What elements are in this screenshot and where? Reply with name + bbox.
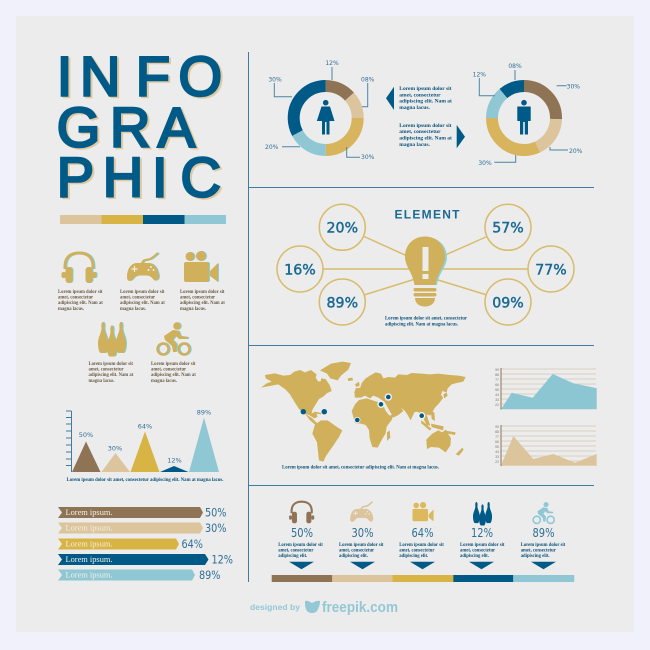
note: women: Lorem ipsum dolor sit bbox=[399, 86, 452, 92]
text: cyclist bbox=[151, 362, 196, 384]
icon: woman bbox=[317, 100, 334, 134]
text: headphones bbox=[58, 290, 103, 312]
stat: controller 30%: Lorem ipsum dolor sit bbox=[339, 543, 384, 548]
Central America and Caribbean bbox=[305, 414, 318, 426]
values bbox=[265, 60, 375, 161]
axis ticks: 77 bbox=[495, 435, 499, 439]
ribbon labels: Lorem ipsum. bbox=[66, 540, 112, 548]
axis ticks bbox=[495, 368, 499, 407]
note: women: adipiscing elit. Nam at bbox=[399, 98, 452, 104]
note: men: amet, consectetur bbox=[399, 129, 441, 135]
title colour bar bbox=[60, 215, 226, 224]
note: men bbox=[399, 123, 452, 148]
text: video camera: magna lacus. bbox=[180, 307, 206, 312]
text: headphones: adipiscing elit. Nam at bbox=[58, 301, 103, 306]
text: cyclist: amet, consectetur bbox=[151, 368, 186, 372]
icon: freepik logo bbox=[305, 601, 320, 613]
values: 12% bbox=[325, 60, 339, 67]
ribbon labels bbox=[66, 508, 112, 580]
leader lines bbox=[479, 70, 568, 162]
text: cyclist: magna lacus. bbox=[151, 379, 177, 384]
icon: bowling pins bbox=[98, 322, 127, 356]
triangle values: 50% bbox=[79, 431, 93, 439]
title: INFO bbox=[57, 44, 222, 108]
stat: camera 64%: Lorem ipsum dolor sit bbox=[399, 543, 444, 548]
stat: cyclist 89%: adipiscing elit. bbox=[521, 554, 550, 559]
donut: male bbox=[473, 63, 583, 167]
circle values: 57% bbox=[492, 220, 524, 236]
note: men: magna lacus. bbox=[399, 142, 430, 148]
values bbox=[473, 63, 583, 167]
triangle values: 64% bbox=[138, 422, 152, 430]
area chart: blue bbox=[495, 368, 597, 410]
text: video camera: adipiscing elit. Nam at bbox=[180, 301, 225, 306]
map caption: Lorem ipsum dolor sit amet, consectetur adipiscing elit. Nam at magna lacus. bbox=[282, 466, 439, 470]
values: 20% bbox=[569, 148, 583, 155]
axis ticks: 99 bbox=[495, 368, 499, 372]
text: headphones: magna lacus. bbox=[58, 307, 84, 312]
text: bowling pins: adipiscing elit. Nam at bbox=[88, 373, 134, 378]
stat: controller 30%: 30% bbox=[352, 526, 374, 540]
ribbon values: 89% bbox=[199, 568, 221, 582]
Eurasia bbox=[354, 372, 466, 426]
axis ticks bbox=[495, 425, 499, 464]
ribbon values bbox=[182, 506, 233, 582]
axis ticks: 44 bbox=[495, 393, 499, 397]
axis ticks: 33 bbox=[495, 455, 499, 459]
icon: game controller bbox=[127, 253, 160, 281]
axis ticks: 99 bbox=[495, 425, 499, 429]
ribbon labels: Lorem ipsum. bbox=[66, 555, 112, 564]
Greenland bbox=[320, 362, 351, 380]
icon: video camera bbox=[184, 251, 219, 282]
Australia bbox=[426, 430, 451, 452]
icon: cyclist bbox=[158, 322, 190, 354]
text: game controller: adipiscing elit. Nam at bbox=[120, 301, 165, 306]
freepik credit bbox=[250, 600, 398, 616]
ribbon bars bbox=[58, 506, 233, 582]
text: game controller: amet, consectetur bbox=[120, 296, 155, 300]
axis ticks: 22 bbox=[495, 403, 499, 407]
South America bbox=[312, 420, 342, 462]
axis ticks: 55 bbox=[495, 388, 499, 392]
circle values: 89% bbox=[327, 296, 358, 312]
islands bbox=[421, 420, 432, 430]
circle values: 09% bbox=[492, 296, 524, 312]
text and arrows: donut notes bbox=[386, 86, 465, 148]
text: game controller: Lorem ipsum dolor sit bbox=[120, 290, 165, 295]
chart axis bbox=[66, 411, 72, 472]
axis ticks: 66 bbox=[495, 383, 499, 387]
Africa bbox=[352, 398, 394, 448]
stat: headphones 50% bbox=[278, 502, 323, 569]
ribbon values: 30% bbox=[205, 521, 227, 535]
stat: controller 30%: adipiscing elit. bbox=[339, 554, 368, 559]
icon grid bbox=[58, 251, 225, 384]
note: women: magna lacus. bbox=[399, 105, 430, 111]
world map bbox=[261, 362, 466, 470]
icon: light bulb bbox=[405, 236, 447, 306]
axis ticks: 44 bbox=[495, 450, 499, 454]
axis ticks: 55 bbox=[495, 445, 499, 449]
values: 08% bbox=[508, 63, 522, 70]
stat: pins 12%: Lorem ipsum dolor sit bbox=[460, 543, 505, 548]
axis ticks: 66 bbox=[495, 440, 499, 444]
stat: camera 64%: amet, consectetur bbox=[399, 548, 434, 554]
triangle values: 89% bbox=[197, 408, 211, 416]
ribbon values: 12% bbox=[212, 552, 233, 566]
note: women: amet, consectetur bbox=[399, 92, 441, 98]
section dividers bbox=[248, 52, 594, 582]
text: video camera bbox=[180, 290, 225, 312]
stat: cyclist 89%: 89% bbox=[532, 526, 554, 540]
values: 12% bbox=[473, 72, 486, 79]
bottom stat row bbox=[278, 502, 566, 569]
text: game controller bbox=[120, 290, 165, 312]
map markers bbox=[301, 394, 425, 423]
stat: camera 64%: 64% bbox=[412, 526, 434, 540]
icon: man bbox=[517, 100, 531, 134]
text: headphones: Lorem ipsum dolor sit bbox=[58, 290, 103, 295]
title: INFO bbox=[59, 46, 224, 109]
freepik credit: designed by bbox=[250, 602, 300, 612]
title: GRA bbox=[59, 97, 198, 160]
triangle chart bbox=[66, 408, 224, 483]
triangles bbox=[72, 418, 219, 472]
note: men: Lorem ipsum dolor sit bbox=[399, 123, 452, 129]
text: cyclist: Lorem ipsum dolor sit bbox=[151, 362, 196, 367]
note: women bbox=[399, 86, 452, 111]
triangle values: 30% bbox=[108, 444, 122, 452]
arrow: right bbox=[457, 125, 465, 148]
freepik credit: freepik.com bbox=[322, 600, 398, 616]
axis ticks: 33 bbox=[495, 398, 499, 402]
stat: pins 12% bbox=[460, 502, 505, 569]
caption bbox=[385, 316, 467, 328]
triangle values: 12% bbox=[167, 456, 182, 464]
text: game controller: magna lacus. bbox=[120, 307, 146, 312]
text: bowling pins: amet, consectetur bbox=[88, 368, 124, 372]
stat: camera 64%: adipiscing elit. bbox=[399, 554, 428, 559]
ribbon labels: Lorem ipsum. bbox=[66, 570, 112, 580]
circle values: 77% bbox=[535, 262, 567, 278]
ribbon values: 50% bbox=[205, 506, 227, 520]
stat: headphones 50%: 50% bbox=[291, 526, 313, 540]
stat: headphones 50%: adipiscing elit. bbox=[278, 554, 307, 559]
caption: adipiscing elit. Nam at magna lacus. bbox=[385, 322, 458, 328]
stat: cyclist 89%: Lorem ipsum dolor sit bbox=[521, 543, 566, 548]
circle values: 20% bbox=[327, 220, 358, 236]
axis ticks: 77 bbox=[495, 378, 499, 382]
chart caption: Lorem ipsum dolor sit amet, consectetur adipiscing elit. Nam at magna lacus. bbox=[66, 478, 224, 483]
stat: pins 12%: amet, consectetur bbox=[460, 548, 495, 554]
stat: headphones 50%: amet, consectetur bbox=[278, 548, 313, 554]
note: men: adipiscing elit. Nam at bbox=[399, 136, 452, 142]
stat: controller 30%: amet, consectetur bbox=[339, 548, 374, 554]
stat: camera 64% bbox=[399, 502, 444, 569]
stat: pins 12%: adipiscing elit. bbox=[460, 554, 489, 559]
circles bbox=[277, 204, 574, 325]
stat: cyclist 89%: amet, consectetur bbox=[521, 548, 556, 554]
caption: Lorem ipsum dolor sit amet, consectetur bbox=[385, 316, 467, 322]
ribbon labels: Lorem ipsum. bbox=[66, 508, 112, 517]
title bbox=[57, 44, 224, 210]
text: video camera: Lorem ipsum dolor sit bbox=[180, 290, 225, 295]
text: bowling pins: magna lacus. bbox=[88, 379, 115, 384]
text: bowling pins bbox=[88, 362, 134, 384]
area chart: tan bbox=[495, 425, 597, 466]
values: 30% bbox=[268, 76, 282, 84]
North America bbox=[261, 370, 332, 418]
values: 30% bbox=[478, 160, 492, 167]
axis ticks: 22 bbox=[495, 460, 499, 464]
text: video camera: amet, consectetur bbox=[180, 296, 215, 300]
stat: headphones 50%: Lorem ipsum dolor sit bbox=[278, 543, 323, 548]
bottom colour bar bbox=[272, 575, 574, 582]
title: PHIC bbox=[59, 147, 223, 210]
axis ticks: 88 bbox=[495, 373, 499, 377]
ribbon labels: Lorem ipsum. bbox=[66, 524, 112, 532]
ribbon values: 64% bbox=[182, 537, 203, 551]
values: 30% bbox=[361, 154, 375, 161]
axis ticks: 88 bbox=[495, 430, 499, 434]
stat: cyclist 89% bbox=[521, 502, 566, 569]
donut: female bbox=[265, 60, 375, 161]
leader lines bbox=[274, 67, 368, 157]
triangle values bbox=[79, 408, 211, 464]
heading: ELEMENT bbox=[394, 208, 460, 222]
stat: pins 12%: 12% bbox=[471, 526, 493, 540]
text: bowling pins: Lorem ipsum dolor sit bbox=[88, 362, 133, 367]
connectors bbox=[323, 236, 528, 295]
arrow: left bbox=[386, 87, 394, 110]
title: PHIC bbox=[57, 146, 221, 208]
circle values bbox=[284, 220, 567, 312]
element diagram bbox=[277, 204, 574, 328]
title: GRA bbox=[57, 96, 196, 158]
values: 30% bbox=[567, 84, 580, 90]
icon: headphones bbox=[62, 253, 98, 283]
values: 08% bbox=[361, 76, 375, 84]
text: cyclist: adipiscing elit. Nam at bbox=[151, 373, 196, 378]
text: headphones: amet, consectetur bbox=[58, 296, 93, 300]
values: 20% bbox=[265, 144, 279, 151]
stat: controller 30% bbox=[339, 502, 384, 569]
circle values: 16% bbox=[284, 262, 316, 278]
